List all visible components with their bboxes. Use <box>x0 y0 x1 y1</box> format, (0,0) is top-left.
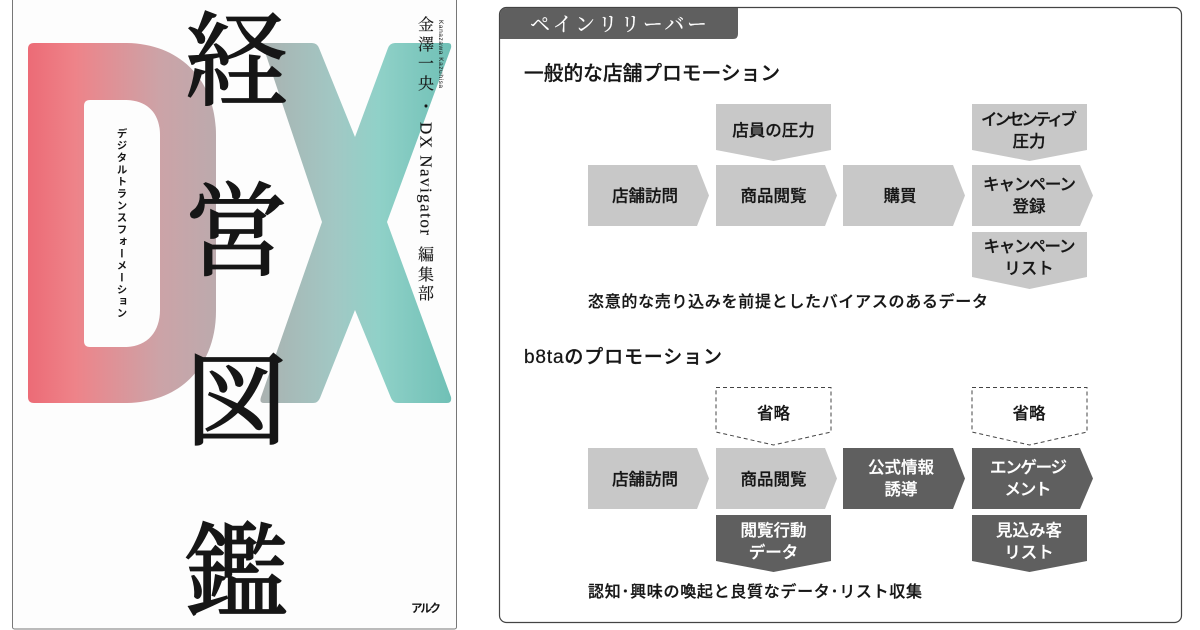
book title: 営 <box>186 178 288 290</box>
publisher logo: アルク <box>411 602 441 615</box>
step: store visit <box>588 448 709 509</box>
callout: incentive pressure: インセンティブ <box>981 109 1078 129</box>
subtitle: digital transformation: デジタルトランスフォーメーション <box>116 127 128 318</box>
callout: prospect list: 見込み客 <box>996 521 1062 540</box>
cover background <box>12 0 456 629</box>
letter D graphic <box>28 43 216 403</box>
book cover <box>12 0 456 630</box>
author name: 金 <box>418 16 434 34</box>
step: campaign signup: 登録 <box>1012 197 1046 216</box>
section: general store promotion <box>524 63 1093 311</box>
section: b8ta promotion <box>524 346 1093 601</box>
callout: prospect list: リスト <box>1004 544 1054 562</box>
author name: ・ <box>418 99 434 116</box>
callout: omitted: 省略 <box>1012 404 1046 423</box>
step: product browsing <box>716 165 837 226</box>
step: engagement <box>972 448 1093 509</box>
callout: campaign list: リスト <box>1004 260 1054 278</box>
callout: campaign list <box>972 232 1087 289</box>
callout: campaign list: キャンペーン <box>984 238 1076 256</box>
author name: 集 <box>418 266 434 284</box>
step: store visit <box>588 165 709 226</box>
section heading: b8taのプロモーション <box>524 346 722 368</box>
callout: staff pressure <box>716 104 831 161</box>
book title: 図 <box>186 347 288 460</box>
author name: 部 <box>418 285 434 303</box>
book title <box>186 7 288 630</box>
step: purchase <box>843 165 965 226</box>
book title: 鑑 <box>186 518 288 630</box>
callout: browsing behavior data: 閲覧行動 <box>740 521 806 540</box>
author name: 央 <box>418 75 434 93</box>
panel tab heading <box>500 8 738 39</box>
section summary: 認知･興味の喚起と良質なデータ･リスト収集 <box>588 582 922 601</box>
section summary: 恣意的な売り込みを前提としたバイアスのあるデータ <box>588 292 988 311</box>
callout: staff pressure: 店員の圧力 <box>732 121 815 140</box>
step: official info guidance: 誘導 <box>884 480 918 499</box>
step: purchase: 購買 <box>884 186 916 206</box>
step: engagement: エンゲージ <box>990 458 1067 477</box>
author name: 澤 <box>418 36 434 54</box>
step: official info guidance <box>843 448 965 509</box>
callout: browsing behavior data <box>716 515 831 572</box>
panel tab heading: ペインリリーバー <box>530 14 707 36</box>
section heading: 一般的な店舗プロモーション <box>524 63 780 85</box>
callout: omitted <box>716 388 831 445</box>
step: official info guidance: 公式情報 <box>868 458 934 477</box>
author name <box>416 16 436 303</box>
step: campaign signup: キャンペーン <box>983 176 1076 194</box>
callout: prospect list <box>972 515 1087 572</box>
author name: 一 <box>418 56 434 73</box>
callout: omitted: 省略 <box>757 404 790 423</box>
step: product browsing: 商品閲覧 <box>740 186 806 206</box>
panel: pain reliever <box>500 8 1182 622</box>
letter X graphic <box>260 43 451 403</box>
step: product browsing <box>716 448 837 509</box>
step: engagement: メント <box>1004 481 1052 499</box>
author romanized name: Kanazawa Kazuhisa <box>437 20 444 88</box>
panel frame <box>500 8 1182 622</box>
author name: DX Navigator <box>416 122 436 235</box>
step: campaign signup <box>972 165 1093 226</box>
callout: incentive pressure: 圧力 <box>1012 132 1046 151</box>
book title: 経 <box>186 7 288 120</box>
step: store visit: 店舗訪問 <box>612 470 678 489</box>
step: product browsing: 商品閲覧 <box>740 470 806 489</box>
step: store visit: 店舗訪問 <box>612 186 678 206</box>
callout: omitted <box>972 388 1087 445</box>
callout: browsing behavior data: データ <box>749 542 798 562</box>
author name: 編 <box>418 246 434 264</box>
callout: incentive pressure <box>972 104 1087 161</box>
